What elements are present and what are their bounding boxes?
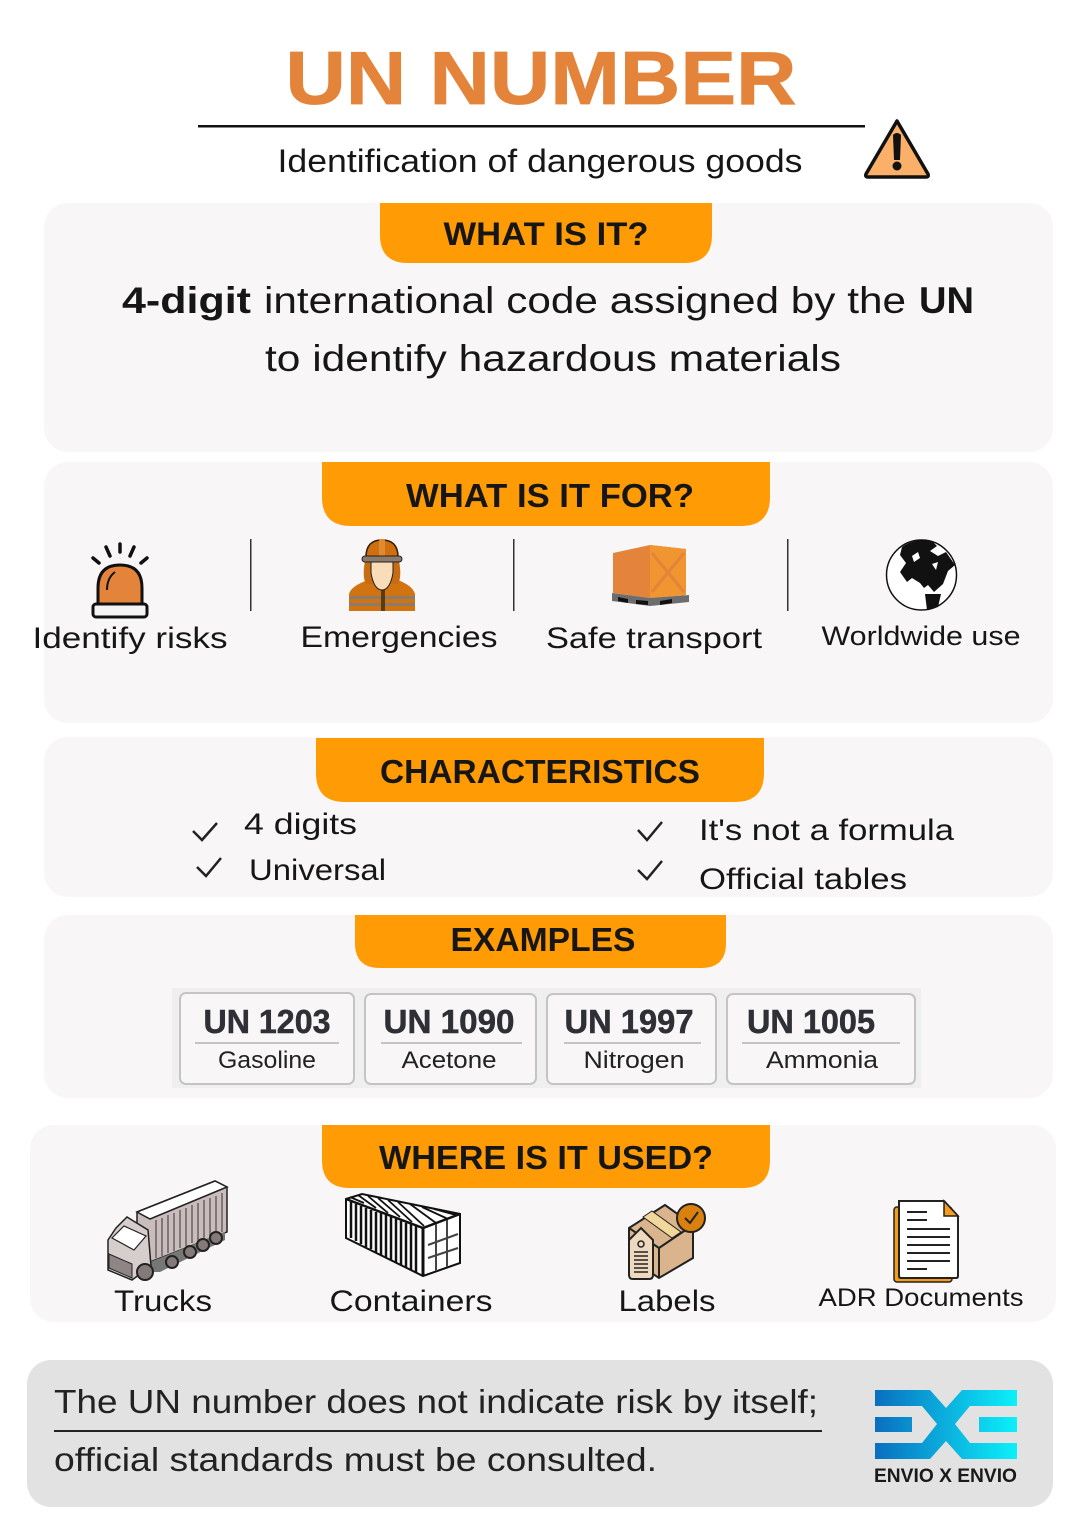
icon: document [894, 1201, 958, 1282]
card: UN 1005 [727, 994, 915, 1084]
heading: where is it used [322, 1125, 770, 1188]
text: note [54, 1383, 822, 1478]
card: UN 1997 [547, 994, 716, 1084]
text: definition: to identify hazardous materials [265, 338, 841, 379]
label: emergencies: Emergencies [300, 621, 498, 654]
card: UN 1203 [180, 993, 354, 1084]
heading: what is it for [322, 462, 770, 526]
card: UN 1005: UN 1005 [747, 1003, 875, 1040]
panel: characteristics [44, 737, 1053, 897]
item: 4 digits [193, 808, 357, 841]
heading: what is it [380, 203, 712, 263]
label: adr documents: ADR Documents [818, 1284, 1024, 1312]
item: 4 digits: 4 digits [244, 808, 357, 841]
logo: envio x envio: ENVIO X ENVIO [874, 1466, 1017, 1487]
item: not a formula: It's not a formula [699, 814, 954, 847]
label: containers: Containers [330, 1285, 492, 1318]
icon: warning triangle [866, 121, 928, 177]
text: definition: international code assigned by the [264, 280, 906, 321]
icon: alarm light [93, 544, 147, 617]
heading: where is it used: WHERE IS IT USED? [379, 1139, 713, 1176]
text: note: The UN number does not indicate risk by itself; [54, 1383, 818, 1420]
panel: examples [44, 915, 1053, 1098]
card: UN 1997: Nitrogen [584, 1047, 684, 1074]
logo: envio x envio [874, 1390, 1017, 1487]
panel: where is it used [30, 1125, 1056, 1322]
text: definition: UN [919, 280, 974, 321]
panel: footer note [27, 1360, 1053, 1507]
item: universal [197, 854, 386, 887]
label: identify risks: Identify risks [32, 622, 228, 655]
heading: examples [355, 915, 726, 968]
panel: what is it for [32, 462, 1053, 723]
item: official tables [638, 861, 907, 896]
card: UN 1203: UN 1203 [204, 1003, 330, 1040]
item: not a formula [638, 814, 954, 847]
text: definition [122, 280, 974, 379]
card: UN 1203: Gasoline [218, 1047, 316, 1074]
panel: what is it [44, 203, 1053, 452]
icon: truck [108, 1181, 227, 1280]
item: universal: Universal [249, 854, 386, 887]
icon: labelled box [629, 1204, 705, 1279]
icon: emergency worker [349, 539, 415, 611]
card: UN 1005: Ammonia [766, 1047, 879, 1074]
icon: globe [886, 540, 956, 610]
card: UN 1090: Acetone [402, 1047, 496, 1074]
subtitle: Identification of dangerous goods [278, 143, 802, 179]
heading: what is it: WHAT IS IT? [444, 216, 648, 252]
item: official tables: Official tables [699, 863, 907, 896]
heading: characteristics: CHARACTERISTICS [380, 753, 700, 790]
heading: what is it for: WHAT IS IT FOR? [406, 477, 694, 514]
label: safe transport: Safe transport [546, 622, 763, 655]
icon: shipping container [346, 1194, 460, 1276]
label: trucks: Trucks [114, 1285, 212, 1318]
icon: palletized cargo [612, 545, 689, 606]
heading: examples: EXAMPLES [450, 921, 636, 958]
heading: characteristics [316, 738, 764, 802]
text: note: official standards must be consulted. [54, 1441, 657, 1478]
label: labels: Labels [618, 1285, 716, 1318]
card: UN 1090 [365, 994, 536, 1084]
label: worldwide use: Worldwide use [822, 621, 1020, 651]
text: definition: 4-digit [122, 280, 251, 321]
card: UN 1090: UN 1090 [384, 1003, 514, 1040]
title: UN NUMBER [286, 36, 796, 120]
card: UN 1997: UN 1997 [564, 1003, 694, 1040]
